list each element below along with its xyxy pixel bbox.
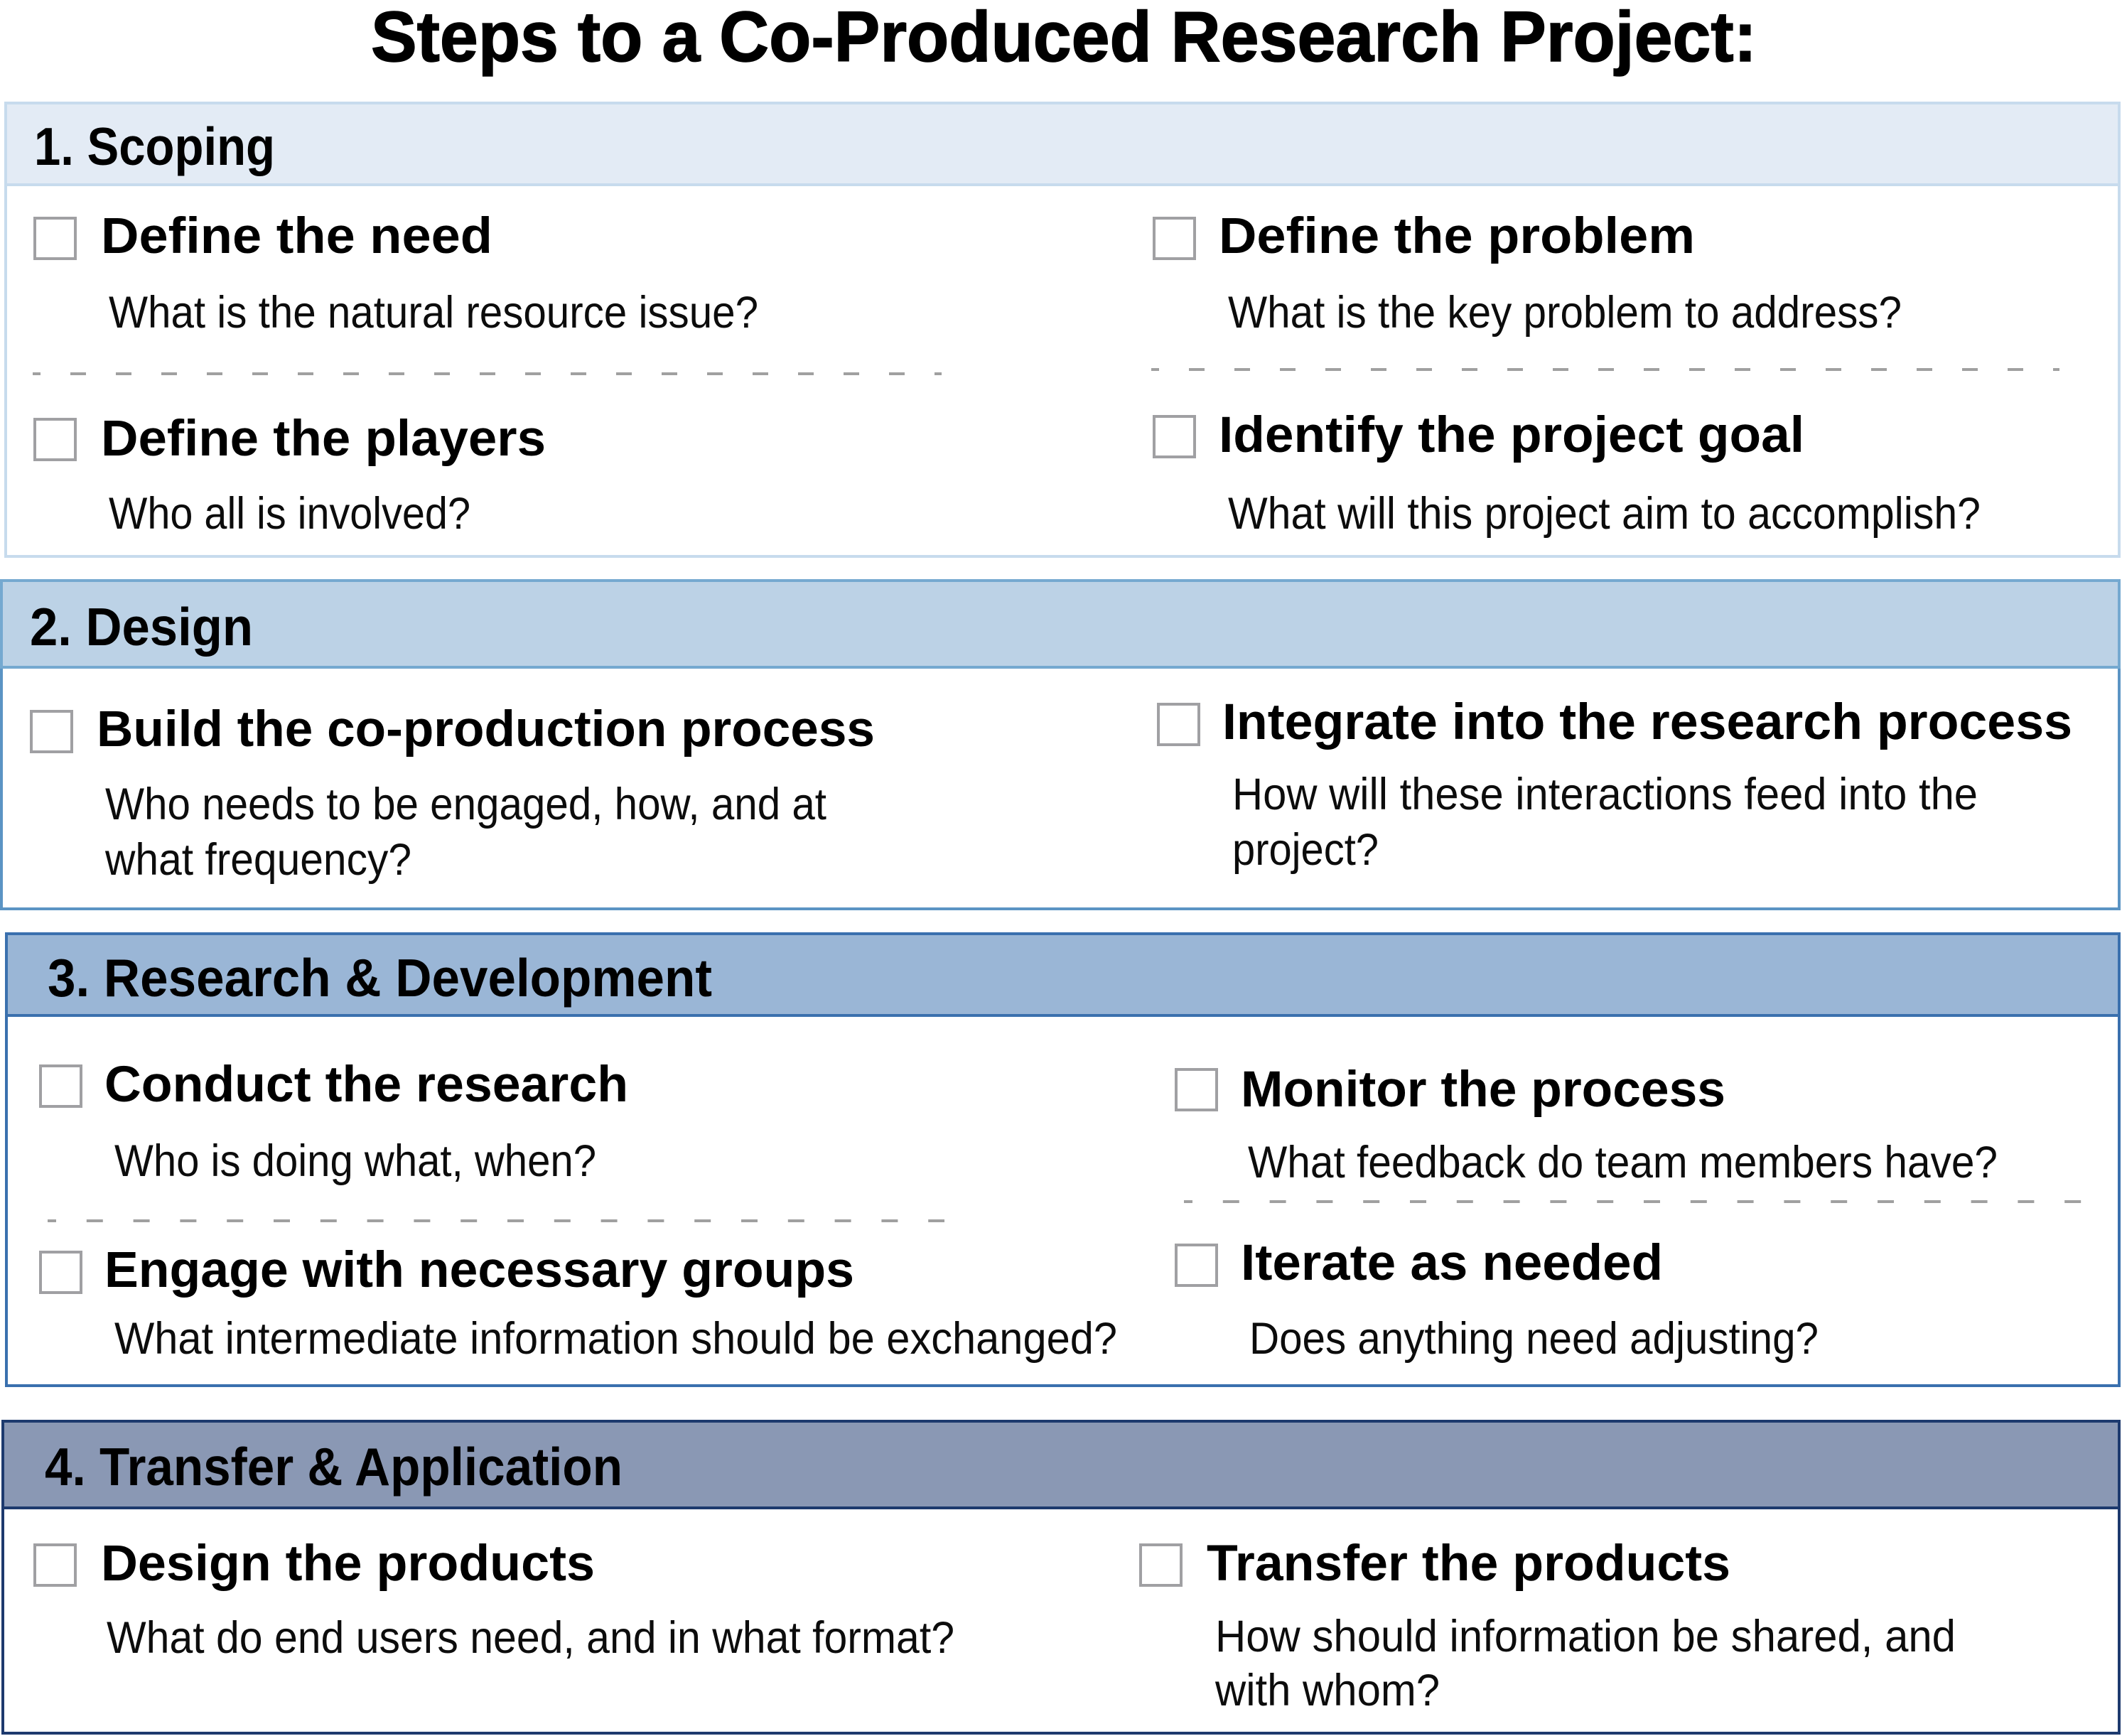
item question, line 1: Who needs to be engaged, how, and at (105, 780, 826, 829)
item title: Design the products (101, 1536, 595, 1592)
item title: Conduct the research (104, 1057, 628, 1113)
item title: Transfer the products (1207, 1536, 1730, 1592)
item question, line 2: with whom? (1215, 1666, 1440, 1715)
panel: 1. Scoping (6, 103, 2119, 556)
item title: Integrate into the research process (1222, 694, 2072, 750)
item question: What do end users need, and in what format? (107, 1613, 954, 1663)
header band: research and development (6, 934, 2119, 1015)
heading: 4. Transfer & Application: 4. Transfer & Application (45, 1437, 623, 1497)
item question, line 2: what frequency? (104, 835, 411, 885)
icon: checkbox (41, 1252, 81, 1293)
item: design the products (35, 1536, 954, 1663)
item title: Iterate as needed (1241, 1235, 1663, 1291)
panel: 4. Transfer & Application (3, 1421, 2119, 1733)
item: define the need (35, 208, 758, 338)
item question, line 2: project? (1232, 825, 1379, 875)
icon: checkbox (1141, 1545, 1181, 1585)
icon: checkbox (1176, 1245, 1217, 1285)
icon: checkbox (1154, 218, 1195, 259)
item: transfer the products (1141, 1536, 1956, 1715)
icon: checkbox (35, 218, 75, 259)
item title: Monitor the process (1241, 1062, 1725, 1118)
item: conduct the research (41, 1057, 628, 1186)
item title: Define the problem (1219, 208, 1695, 264)
icon: checkbox (1176, 1069, 1217, 1110)
heading: 1. Scoping: 1. Scoping (34, 117, 275, 176)
icon: checkbox (1154, 416, 1195, 457)
item: define the players (35, 411, 546, 539)
item title: Define the players (101, 411, 546, 467)
panel frame: design (1, 581, 2119, 909)
item question: Who all is involved? (109, 489, 470, 539)
heading: 2. Design: 2. Design (30, 597, 253, 657)
panel: 3. Research & Development (6, 934, 2119, 1386)
item question: What will this project aim to accomplish? (1228, 489, 1981, 539)
item: iterate as needed (1176, 1235, 1819, 1364)
header band: transfer and application (3, 1421, 2119, 1508)
panel: 2. Design (1, 581, 2119, 909)
panel frame: transfer and application (3, 1421, 2119, 1733)
item question, line 1: How will these interactions feed into the (1232, 770, 1978, 819)
item title: Identify the project goal (1219, 407, 1804, 463)
item: engage with necessary groups (41, 1242, 1117, 1364)
item: identify the project goal (1154, 407, 1981, 539)
item: monitor the process (1176, 1062, 1998, 1187)
panel frame: scoping (6, 103, 2119, 556)
item title: Build the co-production process (97, 701, 875, 758)
item title: Define the need (101, 208, 492, 264)
item question, line 1: How should information be shared, and (1215, 1612, 1956, 1661)
heading: 3. Research & Development: 3. Research & Development (48, 948, 712, 1008)
item question: What is the key problem to address? (1228, 288, 1902, 338)
icon: checkbox (35, 419, 75, 460)
item: build the co-production process (31, 701, 875, 885)
item: integrate into the research process (1158, 694, 2072, 875)
item question: What intermediate information should be exchanged? (114, 1314, 1117, 1364)
item question: Does anything need adjusting? (1249, 1314, 1819, 1364)
panel frame: research and development (6, 934, 2119, 1386)
icon: checkbox (1158, 704, 1199, 745)
icon: checkbox (35, 1545, 75, 1585)
icon: checkbox (41, 1066, 81, 1106)
item question: What is the natural resource issue? (109, 288, 758, 338)
item: define the problem (1154, 208, 1902, 338)
item title: Engage with necessary groups (104, 1242, 854, 1298)
item question: Who is doing what, when? (114, 1136, 596, 1186)
header band: scoping (6, 103, 2119, 185)
header band: design (1, 581, 2119, 667)
icon: checkbox (31, 711, 72, 752)
item question: What feedback do team members have? (1248, 1138, 1998, 1187)
